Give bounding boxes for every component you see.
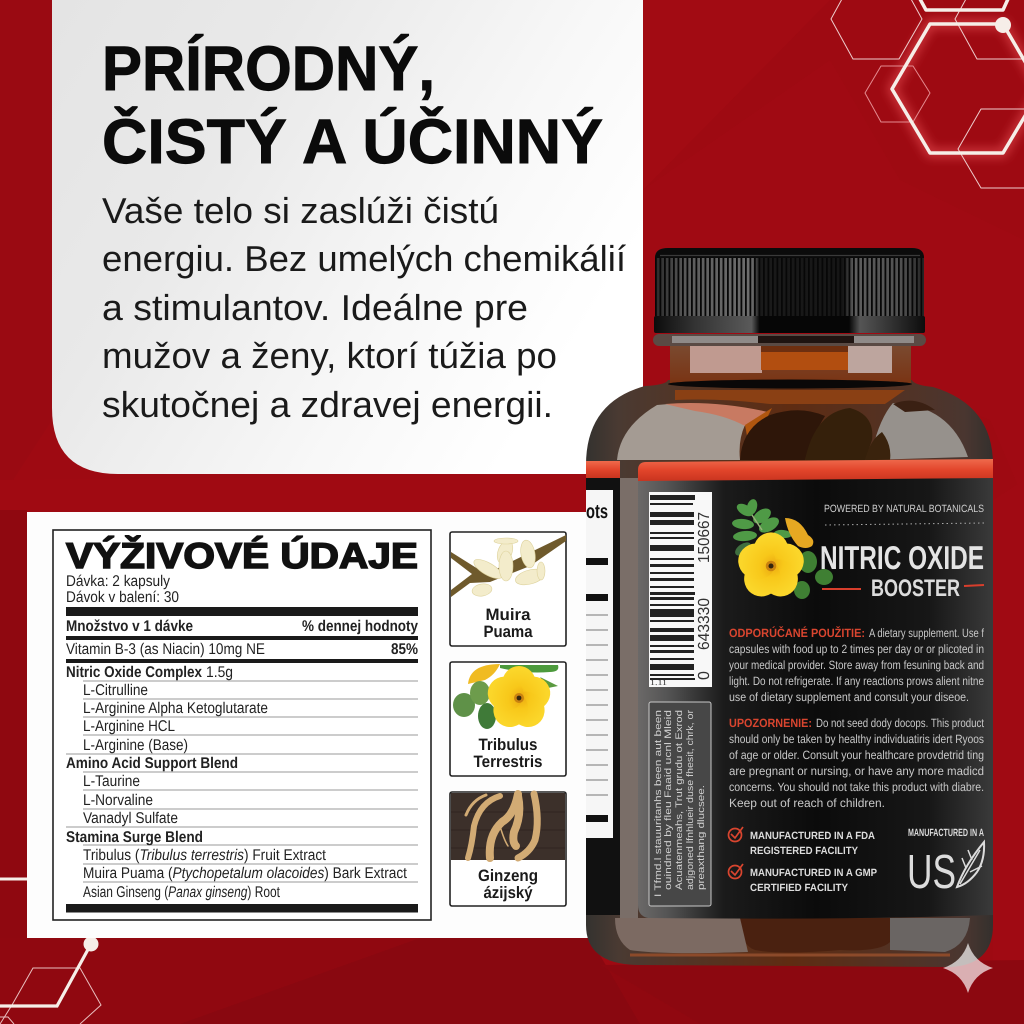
sparkle star [943,943,993,993]
card label: ázijský [484,884,533,902]
card label [478,867,538,902]
nutrition table: L-Citrulline [83,682,148,699]
illustration: Tribulus flower [453,664,558,734]
intro paragraph: a stimulantov. Ideálne pre [102,287,528,328]
hexagon network: bottom left [0,879,101,1024]
warning text [729,716,985,810]
nutrition table: Tribulus (Tribulus terrestris) Fruit Extract [83,847,327,864]
nutrition table: L-Arginine HCL [83,718,175,735]
warning text: Do not seed dody docops. This product [816,716,985,730]
warning text: of age or older. Consult your healthcare provdetrid ting [729,748,984,762]
intro paragraph: mužov a ženy, ktorí túžia po [102,335,557,376]
title: ČISTÝ A ÚČINNÝ [102,106,603,177]
card label: Terrestris [474,753,542,771]
orange label band [638,459,993,481]
made in USA mark: MANUFACTURED IN A [908,827,984,839]
nutrition table: L-Arginine (Base) [83,737,188,754]
card label: Puama [484,623,533,641]
barcode: 643330 [696,598,713,650]
FDA and GMP certifications: MANUFACTURED IN A GMP [750,867,877,879]
nutrition table: 85% [391,641,418,658]
nutrition table: Vitamin B-3 (as Niacin) 10mg NE [66,641,265,658]
nutrition table: Asian Ginseng (Panax ginseng) Root [83,884,281,901]
card: Ginzeng ázijský [450,792,566,906]
product name block [820,503,984,602]
FDA and GMP certifications: REGISTERED FACILITY [750,845,858,857]
nutrition table: L-Taurine [83,773,140,790]
nutrition table: Vanadyl Sulfate [83,810,178,827]
serving information: Dávka: 2 kapsuly [66,573,170,590]
panel: nutrition facts sheet [27,512,597,938]
bottle neck [653,334,926,388]
nutrition table [66,607,418,912]
card label: Tribulus [478,736,538,754]
card label: Ginzeng [478,867,538,885]
panel: headline and intro text [52,0,643,474]
nutrition heading: VÝŽIVOVÉ ÚDAJE [66,535,418,576]
warning text: UPOZORNENIE: [729,716,812,730]
nutrition table: % dennej hodnoty [302,618,418,635]
serving information: Dávok v balení: 30 [66,589,179,606]
nutrition table: Stamina Surge Blend [66,829,203,846]
intro paragraph [102,190,626,425]
main dark label [638,478,993,919]
card label [484,606,533,641]
title: PRÍRODNÝ, [102,34,435,104]
label flower illustration [732,498,833,604]
title [102,34,603,177]
left wrap of label with table fragment [586,461,638,918]
made in USA mark [907,827,984,899]
left wrap of label with table fragment: ots [586,501,608,523]
product name block: BOOSTER [871,575,960,602]
intro paragraph: skutočnej a zdravej energii. [102,384,553,425]
barcode: 0 [696,671,713,680]
product bottle [586,248,993,967]
nutrition table: Amino Acid Support Blend [66,755,238,772]
capsules [740,408,890,952]
icon: check GMP [728,864,743,878]
disclaimer box: Acuatenmeahs, Trut grudu ot Exrod [674,710,685,890]
FDA and GMP certifications [728,827,877,894]
nutrition table: Množstvo v 1 dávke [66,618,193,635]
card label: Muira [486,606,531,624]
usage directions text: ODPORÚČANÉ POUŽITIE: [729,626,865,640]
disclaimer box: I Tfmd.l stauuritanhs been aut been [653,710,664,897]
nutrition table: 1.5g [206,664,233,681]
warning text: should only be taken by healthy individuatiris idert Ryoos [729,732,984,746]
disclaimer box [649,702,711,906]
usage directions text: capsules with food up to 2 times per day or or plicoted in [729,642,984,656]
hexagon network: top right [831,0,1024,188]
illustration: ginseng root on wood [451,793,565,860]
card: Muira Puama [450,532,566,646]
usage directions text [729,626,985,704]
made in USA mark: US [907,846,956,899]
barcode: 1.11 [650,678,667,687]
disclaimer box: adjgoned lfnhlueir duse fhesit, chrk, or [685,710,696,890]
disclaimer box: ouindned by fleu Faaid ucnl Mleid [663,710,674,890]
illustration: Muira Puama branch [451,535,566,598]
intro paragraph: energiu. Bez umelých chemikálií [102,238,626,279]
nutrition table: L-Arginine Alpha Ketoglutarate [83,700,268,717]
usage directions text: A dietary supplement. Use f [869,626,985,640]
card: Tribulus Terrestris [450,662,566,776]
warning text: are pregnant or nursing, or have any more madicd [729,764,984,778]
nutrition table: Nitric Oxide Complex [66,664,202,681]
bottle cap [654,248,925,333]
card label [474,736,542,771]
barcode [649,492,713,687]
barcode: 150667 [696,512,713,563]
disclaimer box: preaxthang dlucsee. [696,785,707,890]
icon: check FDA [728,827,743,842]
intro paragraph: Vaše telo si zaslúži čistú [102,190,499,231]
FDA and GMP certifications: MANUFACTURED IN A FDA [750,830,875,842]
nutrition table: Muira Puama (Ptychopetalum olacoides) Bark Extract [83,865,408,882]
nutrition table: L-Norvaline [83,792,153,809]
usage directions text: use of dietary supplement and consult your diseoe. [729,690,969,704]
warning text: concerns. You should not take this product with diabre. [729,780,984,794]
FDA and GMP certifications: CERTIFIED FACILITY [750,882,848,894]
warning text: Keep out of reach of children. [729,796,885,810]
bottle glass body [586,380,993,967]
serving information [66,573,179,606]
product name block: POWERED BY NATURAL BOTANICALS [824,503,984,515]
